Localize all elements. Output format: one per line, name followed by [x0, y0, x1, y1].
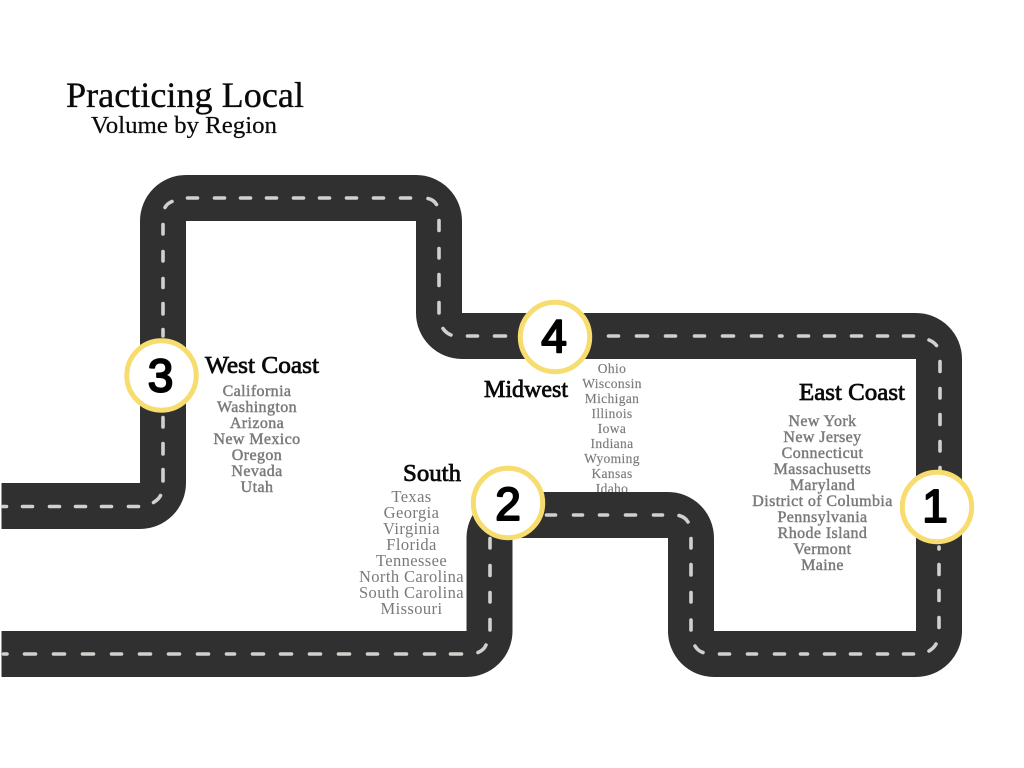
text: Midwest state list: Indiana: [591, 436, 633, 451]
text: Midwest state list: Illinois: [591, 406, 633, 421]
text: East Coast state list: Maryland: [790, 477, 855, 494]
text: West Coast state list: [213, 383, 301, 496]
marker 2: 2: [495, 478, 521, 530]
text: South state list: Missouri: [381, 599, 442, 618]
text: West Coast state list: Nevada: [231, 463, 283, 480]
heading: South: South: [403, 460, 461, 487]
text: East Coast state list: District of Columbia: [752, 493, 893, 510]
marker 3: 3: [148, 350, 173, 402]
text: South state list: South Carolina: [359, 583, 464, 602]
text: Midwest state list: Wisconsin: [582, 376, 642, 391]
text: Midwest state list: Iowa: [598, 421, 626, 436]
marker 1: [902, 472, 972, 542]
text: East Coast state list: Massachusetts: [774, 461, 871, 478]
road: [2, 198, 940, 654]
text: South state list: Florida: [386, 535, 437, 554]
text: East Coast state list: Pennsylvania: [777, 509, 868, 526]
text: East Coast state list: New York: [788, 413, 857, 430]
heading: East Coast: East Coast: [799, 379, 905, 406]
text: West Coast state list: Arizona: [230, 415, 284, 432]
heading: Midwest: Midwest: [484, 376, 568, 403]
text: West Coast state list: California: [223, 383, 291, 400]
text: East Coast state list: [752, 413, 893, 574]
marker 2: [473, 468, 543, 538]
text: West Coast state list: Oregon: [232, 447, 282, 464]
text: West Coast state list: New Mexico: [213, 431, 301, 448]
marker 4: 4: [541, 310, 567, 362]
title: Volume by Region: [91, 113, 277, 139]
title: Practicing Local: [66, 75, 304, 115]
text: South state list: Georgia: [384, 503, 440, 522]
text: South state list: Tennessee: [376, 551, 447, 570]
text: East Coast state list: Rhode Island: [778, 525, 867, 542]
marker 4: [520, 302, 590, 372]
text: South state list: [359, 487, 464, 618]
text: Midwest state list: [582, 361, 642, 496]
text: East Coast state list: New Jersey: [783, 429, 862, 446]
marker 1: 1: [922, 480, 948, 532]
title: [66, 75, 304, 139]
text: South state list: North Carolina: [359, 567, 464, 586]
text: Midwest state list: Kansas: [591, 466, 633, 481]
text: Midwest state list: Wyoming: [584, 451, 640, 466]
text: East Coast state list: Vermont: [794, 541, 852, 558]
marker 3: [127, 341, 196, 410]
text: South state list: Virginia: [383, 519, 440, 538]
text: East Coast state list: Connecticut: [782, 445, 864, 462]
text: South state list: Texas: [391, 487, 432, 506]
text: West Coast state list: Washington: [217, 399, 297, 416]
heading: West Coast: West Coast: [205, 352, 319, 379]
text: East Coast state list: Maine: [801, 557, 844, 574]
text: Midwest state list: Ohio: [598, 361, 626, 376]
text: West Coast state list: Utah: [241, 479, 273, 496]
text: Midwest state list: Idaho: [596, 481, 628, 496]
text: Midwest state list: Michigan: [585, 391, 639, 406]
